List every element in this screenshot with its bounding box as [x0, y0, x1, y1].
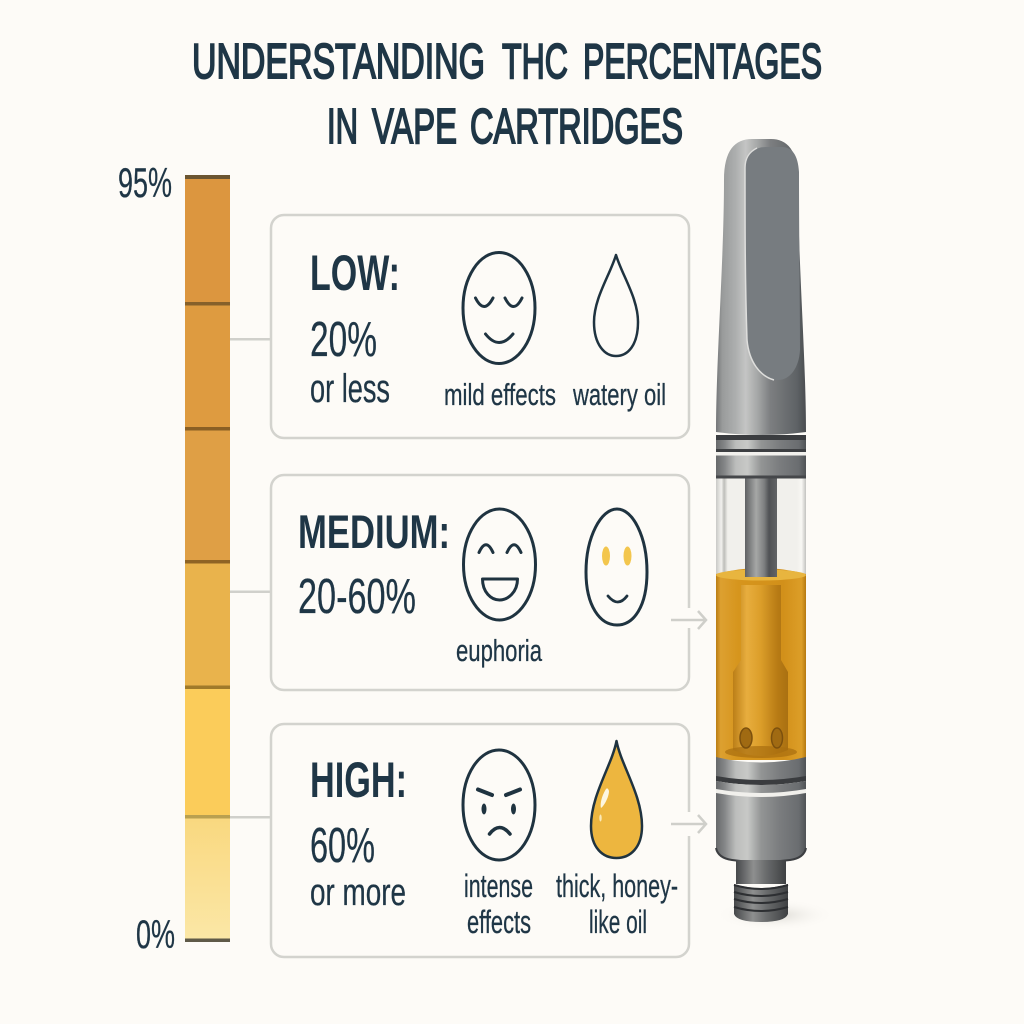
panel outline: medium [271, 475, 689, 690]
THC percentage scale bar [185, 175, 230, 942]
text: or less: or less [310, 367, 390, 411]
panel outline: low [271, 215, 689, 438]
arrow: high panel to cartridge [671, 812, 706, 836]
panel: low [271, 215, 689, 438]
scale label: 95%: 95% [118, 159, 172, 206]
title: UNDERSTANDING [192, 35, 485, 89]
floor shadow [715, 899, 835, 931]
value: 20%: 20% [310, 313, 377, 367]
label: thick, honey-like oil: like oil [589, 904, 647, 940]
arrow: medium panel to cartridge [671, 608, 706, 629]
icon: egg face with amber eyes [586, 509, 647, 625]
label: intense effects: intense [464, 868, 533, 904]
label: intense effects: effects [467, 904, 531, 940]
heading: HIGH: HIGH: [310, 752, 407, 808]
title: PERCENTAGES [583, 35, 822, 89]
text: or more: or more [310, 872, 406, 914]
label: intense effects [464, 868, 533, 940]
cartridge illustration [715, 139, 835, 931]
lower metal base [716, 757, 806, 862]
icon: honey oil drop [591, 741, 642, 858]
panel: medium [271, 475, 689, 690]
center post [745, 478, 777, 578]
ring bands [716, 435, 806, 478]
value: 20-60%: 20-60% [298, 570, 416, 624]
label: thick, honey-like oil: thick, honey- [556, 868, 678, 904]
title [192, 35, 822, 154]
label: euphoria: euphoria [456, 633, 543, 668]
label: mild effects: mild effects [444, 377, 556, 412]
glass tank [716, 478, 806, 578]
title: THC [502, 35, 568, 89]
icon: calm face [463, 252, 535, 364]
label: watery oil: watery oil [572, 377, 666, 412]
scale label: 0%: 0% [136, 913, 175, 957]
title: CARTRIDGES [470, 100, 683, 154]
icon: laughing face [464, 509, 536, 620]
connector: scale to medium panel [230, 590, 271, 593]
icon: angry face [463, 750, 535, 860]
mouthpiece [716, 139, 806, 435]
title: IN [327, 100, 358, 154]
oil reservoir [716, 565, 806, 760]
connector: scale to low panel [230, 338, 271, 340]
threaded post [734, 860, 788, 922]
panel: high [271, 724, 689, 957]
heading: LOW: LOW: [310, 245, 400, 301]
title: VAPE [372, 100, 457, 154]
label: thick, honey-like oil [556, 868, 678, 940]
value: 60%: 60% [310, 819, 375, 873]
heading: MEDIUM: MEDIUM: [298, 505, 450, 558]
connector: scale to high panel [230, 816, 271, 818]
icon: watery oil drop [594, 255, 638, 356]
panel outline: high [271, 724, 689, 957]
